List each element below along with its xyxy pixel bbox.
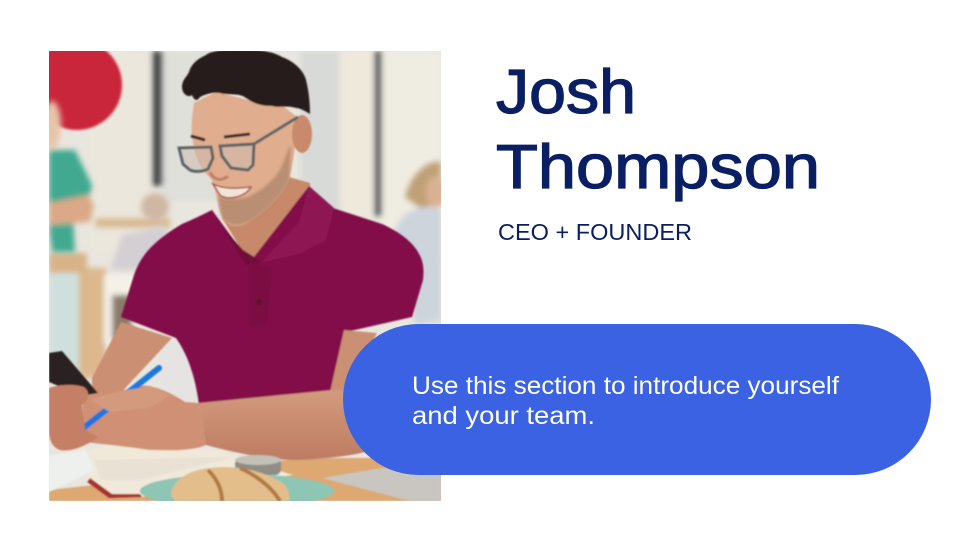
pastry (171, 467, 290, 501)
glasses (179, 117, 298, 171)
table (49, 458, 441, 501)
notebook (87, 450, 293, 498)
hair (182, 50, 310, 114)
beard shading (218, 145, 291, 225)
name heading: Josh (496, 58, 636, 127)
name heading: Thompson (496, 133, 820, 202)
pen (81, 368, 159, 430)
name heading (496, 58, 820, 202)
photo background: blurred cafe (49, 51, 441, 501)
intro text: Use this section to introduce yourself (412, 372, 839, 400)
job title: CEO + FOUNDER (498, 219, 692, 245)
slide canvas (49, 51, 931, 501)
polo shirt (121, 186, 423, 405)
phone hand (49, 385, 98, 450)
thumb over pen (90, 386, 170, 412)
ear (292, 115, 312, 153)
forearm (199, 390, 365, 460)
plate (139, 474, 335, 501)
notebook page shading (95, 457, 234, 480)
eyebrows (191, 134, 250, 140)
background seated people (110, 162, 446, 325)
phone (49, 351, 98, 396)
mouth (213, 184, 251, 198)
writing hand (82, 385, 206, 450)
laptop (322, 468, 441, 501)
background person in green (43, 101, 94, 252)
rolled paper (49, 450, 95, 492)
neck (222, 177, 312, 262)
intro text: and your team. (412, 402, 595, 430)
blue pill panel (343, 324, 931, 475)
man's face (192, 92, 297, 226)
man figure (49, 50, 441, 508)
nose shadow (210, 172, 228, 179)
intro text (412, 372, 839, 430)
photo: man at cafe table (32, 40, 446, 508)
man's upper arms (92, 322, 377, 398)
metal cup (235, 455, 281, 475)
notebook red edge (87, 478, 142, 498)
red balloon (49, 51, 124, 132)
